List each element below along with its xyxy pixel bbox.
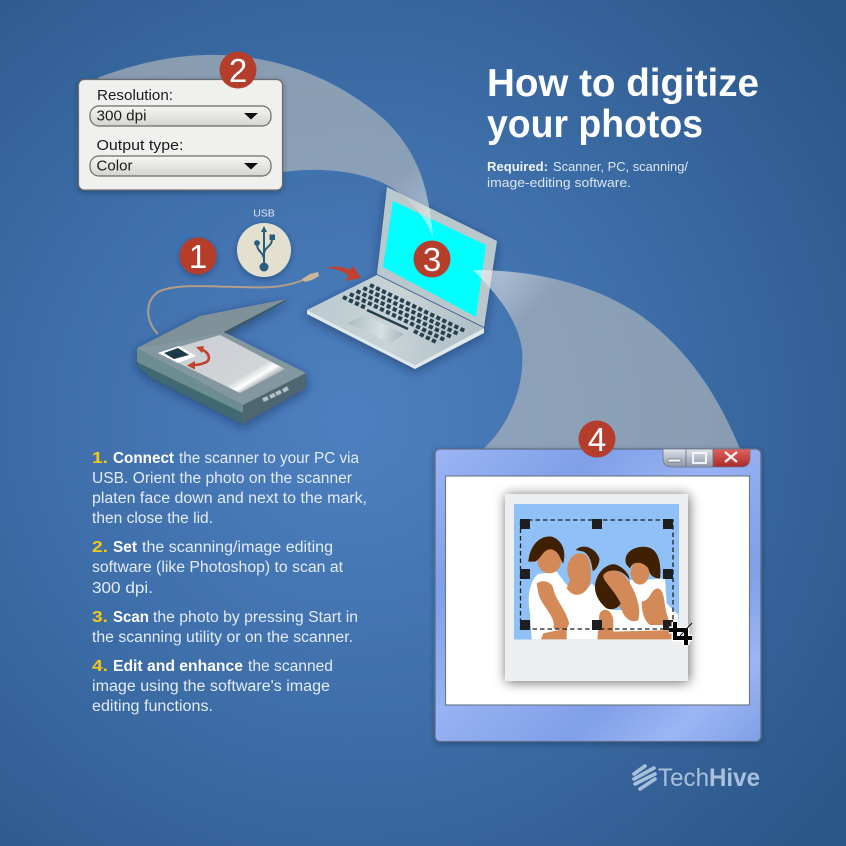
photo print	[505, 494, 692, 681]
step 2: 2.	[92, 539, 108, 556]
keyboard	[343, 285, 465, 343]
photo image	[514, 504, 679, 640]
scanner lid	[137, 299, 287, 348]
trackpad	[347, 315, 404, 343]
panel: editing window	[435, 420, 761, 742]
icon: crop tool	[669, 622, 692, 645]
red rotate arrows	[187, 346, 209, 370]
step 1: the scanner to your PC via	[179, 450, 359, 467]
requirements text: Required:	[487, 160, 548, 174]
scanner photo	[158, 346, 196, 363]
USB connector	[302, 272, 319, 282]
step 1: then close the lid.	[92, 510, 213, 527]
step 1: platen face down and next to the mark,	[92, 490, 367, 507]
output type dropdown	[90, 156, 271, 176]
crop selection	[520, 519, 673, 630]
step 4: image using the software's image	[92, 678, 330, 695]
step 2	[92, 539, 344, 597]
output type label: Output type:	[96, 138, 184, 154]
badge 4	[578, 420, 616, 458]
step 3: the scanning utility or on the scanner.	[92, 629, 353, 646]
window canvas	[446, 476, 750, 705]
step 3	[92, 609, 358, 646]
spacebar	[367, 310, 408, 329]
scanner buttons	[263, 388, 288, 400]
title: your photos	[487, 103, 703, 146]
step 1: 1.	[92, 450, 108, 467]
step 4	[92, 658, 333, 715]
step 3: Scan	[113, 609, 149, 626]
title	[487, 62, 759, 146]
step 1: Connect	[113, 450, 174, 467]
family illustration	[528, 536, 678, 639]
icon: USB	[237, 223, 291, 277]
step 1: USB. Orient the photo on the scanner	[92, 470, 352, 487]
resolution dropdown	[90, 106, 271, 126]
logo wordmark: TechHive	[658, 764, 760, 792]
requirements text	[487, 160, 689, 190]
USB label: USB	[253, 208, 275, 220]
panel: scan settings	[78, 80, 282, 190]
step 4: editing functions.	[92, 698, 213, 715]
step 3: the photo by pressing Start in	[153, 609, 358, 626]
USB cord	[148, 279, 306, 334]
step 1	[92, 450, 367, 527]
TechHive logo	[634, 764, 760, 792]
badge 1	[180, 238, 216, 275]
step 3: 3.	[92, 609, 108, 626]
resolution label: Resolution:	[97, 88, 173, 104]
output type dropdown: Color	[96, 158, 133, 174]
badge 2: 2	[229, 52, 247, 89]
icon: laptop	[307, 187, 497, 369]
step 4: Edit and enhance	[113, 658, 243, 675]
resolution dropdown: 300 dpi	[96, 108, 146, 124]
requirements text: image-editing software.	[487, 176, 631, 190]
beam: panel 2	[97, 55, 433, 237]
steps text	[92, 450, 367, 715]
badge 3	[414, 240, 450, 278]
step 2: the scanning/image editing	[142, 539, 333, 556]
red arrow to laptop	[325, 266, 361, 281]
logo mark	[634, 766, 655, 789]
badge 2	[220, 52, 256, 89]
window controls	[663, 449, 750, 467]
step 2: 300 dpi.	[92, 580, 153, 597]
beam: panel 4	[473, 270, 740, 449]
step 4: the scanned	[248, 658, 333, 675]
title: How to digitize	[487, 62, 759, 105]
step 2: software (like Photoshop) to scan at	[92, 559, 344, 576]
step 2: Set	[113, 539, 137, 556]
badge 1: 1	[189, 238, 207, 275]
badge 3: 3	[423, 241, 441, 278]
icon: scanner	[137, 299, 306, 424]
requirements text: Scanner, PC, scanning/	[553, 160, 689, 174]
scanner glass	[158, 335, 285, 393]
step 4: 4.	[92, 658, 108, 675]
badge 4: 4	[588, 421, 606, 458]
laptop screen	[377, 187, 497, 327]
